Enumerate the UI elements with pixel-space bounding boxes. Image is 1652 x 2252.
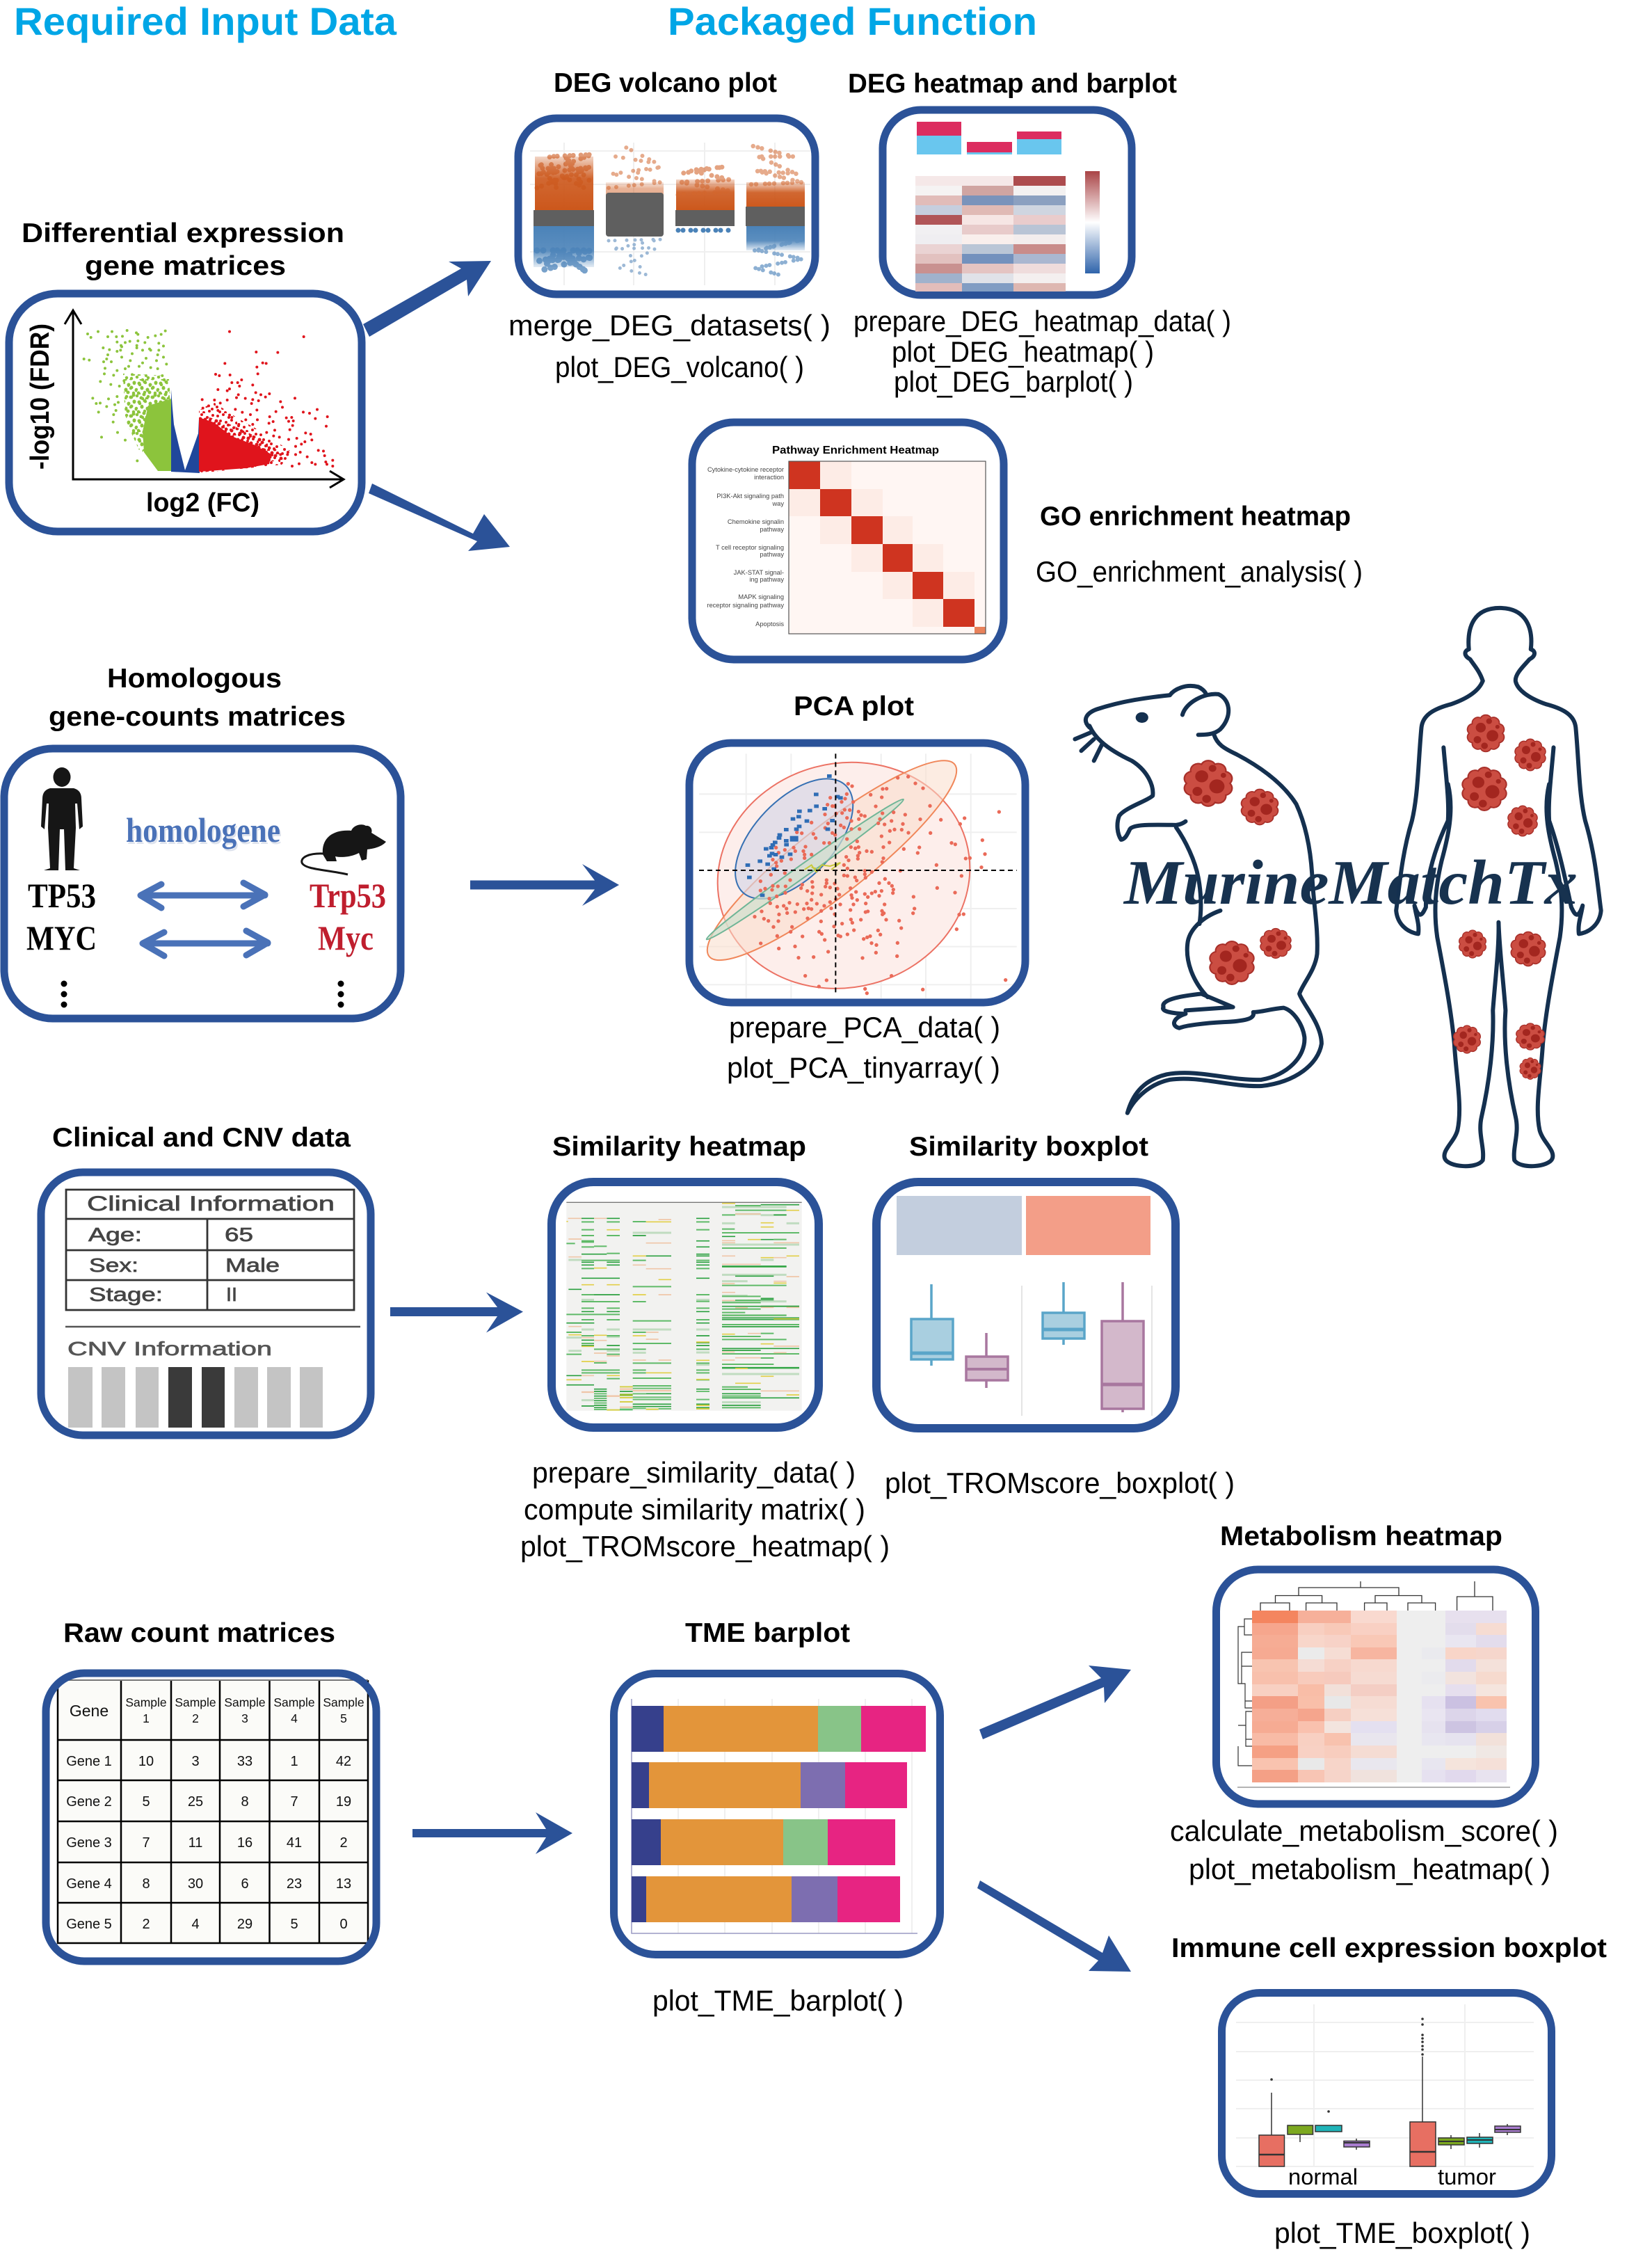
pathway labels: way bbox=[771, 500, 784, 507]
dataset column 2 bbox=[606, 147, 664, 275]
count table: Gene 3 bbox=[66, 1835, 112, 1851]
function labels: PCA: plot_PCA_tinyarray( ) bbox=[727, 1051, 1000, 1084]
pathway labels: Chemokine signalin bbox=[728, 518, 784, 525]
icon: human silhouette bbox=[41, 767, 83, 870]
bar 1 bbox=[632, 1706, 926, 1752]
function labels: similarity heatmap: compute similarity matrix( ) bbox=[524, 1493, 865, 1526]
bar 3 bbox=[632, 1819, 895, 1865]
count table: 1 bbox=[143, 1711, 150, 1725]
dense block rows bbox=[594, 1389, 709, 1407]
function labels: DEG heatmap: prepare_DEG_heatmap_data( ) bbox=[853, 305, 1231, 337]
count table: 3 bbox=[191, 1754, 200, 1769]
pathway labels: JAK-STAT signal- bbox=[734, 569, 784, 576]
peach rows bbox=[568, 1214, 799, 1391]
normal group boxes bbox=[1259, 2079, 1370, 2166]
icon: mouse silhouette bbox=[302, 824, 386, 875]
homologene label: homologene bbox=[126, 810, 280, 849]
heading: Similarity heatmap: Similarity heatmap bbox=[552, 1132, 806, 1162]
heatmap cells bbox=[1252, 1611, 1507, 1782]
heading: GO enrichment heatmap: GO enrichment heatmap bbox=[1040, 502, 1351, 532]
heatmap matrix bbox=[566, 1202, 802, 1411]
count table: 1 bbox=[290, 1754, 298, 1769]
blue sample points bbox=[746, 774, 843, 897]
panel: differential expression volcano bbox=[9, 294, 362, 532]
ellipsis: left bbox=[61, 984, 67, 1005]
double arrow: TP53 to Trp53 bbox=[141, 883, 265, 908]
human gene names: TP53 bbox=[28, 876, 96, 915]
heatmap bbox=[915, 176, 1066, 292]
count table: 8 bbox=[142, 1876, 150, 1892]
red sample points bbox=[755, 776, 1006, 993]
dendrogram: columns bbox=[1260, 1581, 1493, 1611]
dataset column 1 bbox=[534, 154, 594, 273]
tumor group boxes bbox=[1410, 2019, 1521, 2166]
blue non-significant points bbox=[171, 390, 200, 473]
pathway labels bbox=[707, 466, 784, 628]
bar 4 bbox=[632, 1876, 900, 1922]
pathway labels: pathway bbox=[760, 551, 784, 558]
count table: Sample bbox=[323, 1695, 364, 1709]
pathway labels: MAPK signaling bbox=[738, 593, 784, 600]
function labels: DEG heatmap bbox=[853, 305, 1231, 398]
arrow: raw counts to TME bbox=[412, 1812, 572, 1854]
count table: 30 bbox=[188, 1876, 203, 1892]
red upregulated points bbox=[199, 332, 332, 473]
count table: Sample bbox=[125, 1695, 167, 1709]
heading: Homologous gene-counts matrices: Homologous bbox=[107, 664, 282, 694]
function labels: DEG volcano: plot_DEG_volcano( ) bbox=[555, 351, 804, 383]
pathway labels: T cell receptor signaling bbox=[716, 544, 784, 551]
heatmap title: Pathway Enrichment Heatmap bbox=[772, 445, 939, 456]
count table: 5 bbox=[142, 1794, 150, 1810]
function labels: metabolism bbox=[1170, 1814, 1558, 1885]
ellipse: blue bbox=[714, 758, 874, 920]
count table: Gene 2 bbox=[66, 1794, 112, 1810]
mouse gene names: Myc bbox=[318, 918, 374, 957]
count table: 16 bbox=[237, 1835, 252, 1851]
count table: 8 bbox=[241, 1794, 249, 1810]
count table: 29 bbox=[237, 1917, 252, 1932]
clinical table: II bbox=[226, 1284, 237, 1305]
function labels: metabolism: plot_metabolism_heatmap( ) bbox=[1189, 1853, 1550, 1885]
function labels: DEG volcano: merge_DEG_datasets( ) bbox=[508, 309, 831, 342]
human gene names: MYC bbox=[26, 918, 97, 957]
mouse gene names bbox=[310, 876, 386, 957]
heading: Homologous gene-counts matrices bbox=[49, 664, 346, 732]
count table: 25 bbox=[188, 1794, 203, 1810]
mouse gene names: Trp53 bbox=[310, 876, 386, 915]
count table: 7 bbox=[290, 1794, 298, 1810]
count table: 42 bbox=[336, 1754, 351, 1769]
panel: similarity boxplot bbox=[876, 1182, 1176, 1428]
medium green rows bbox=[566, 1206, 799, 1407]
clinical table: Male bbox=[225, 1254, 280, 1276]
arrow: to GO heatmap bbox=[369, 484, 510, 551]
count table: 11 bbox=[189, 1835, 202, 1851]
colour scale bbox=[1085, 171, 1100, 273]
tumors: human bbox=[1454, 715, 1546, 1079]
pathway labels: PI3K-Akt signaling path bbox=[716, 493, 784, 500]
function labels: DEG heatmap: plot_DEG_heatmap( ) bbox=[892, 335, 1154, 368]
dashed axes bbox=[699, 753, 1017, 995]
count table: 2 bbox=[142, 1917, 150, 1932]
heatmap matrix bbox=[789, 461, 986, 634]
origin cluster markers bbox=[805, 863, 840, 872]
heading: Clinical and CNV data: Clinical and CNV data bbox=[52, 1123, 351, 1153]
panel: metabolism heatmap bbox=[1216, 1570, 1536, 1804]
clinical table: 65 bbox=[225, 1224, 253, 1245]
clinical table: Sex: bbox=[89, 1254, 138, 1276]
clinical table: Clinical Information bbox=[87, 1192, 335, 1215]
arrow: to DEG volcano bbox=[363, 261, 491, 337]
panel: similarity heatmap bbox=[552, 1182, 819, 1428]
box 4 bbox=[1102, 1282, 1144, 1412]
count table: 2 bbox=[339, 1835, 348, 1851]
dataset column 3 bbox=[675, 167, 735, 230]
arrow: TME to immune boxplot bbox=[977, 1880, 1131, 1972]
box 2 bbox=[966, 1333, 1008, 1388]
heading: Homologous gene-counts matrices: gene-counts matrices bbox=[49, 702, 346, 732]
ellipse: orange bbox=[688, 737, 976, 984]
count table: 0 bbox=[339, 1917, 348, 1932]
pathway labels: interaction bbox=[754, 474, 784, 481]
dark green rows bbox=[566, 1205, 799, 1406]
heading: PCA plot: PCA plot bbox=[794, 692, 914, 721]
arrow: TME to metabolism bbox=[979, 1666, 1131, 1739]
function labels: DEG volcano bbox=[508, 309, 831, 383]
pathway labels: receptor signaling pathway bbox=[707, 602, 784, 609]
heading: Differential expression gene matrices: gene matrices bbox=[85, 251, 286, 281]
heading: DEG volcano plot: DEG volcano plot bbox=[554, 68, 777, 98]
function labels: PCA: prepare_PCA_data( ) bbox=[729, 1011, 1000, 1044]
bar 2 bbox=[632, 1762, 907, 1808]
ellipse: large red bbox=[692, 735, 995, 1016]
arrow: homologous to PCA bbox=[470, 864, 619, 906]
clinical table: Stage: bbox=[89, 1284, 163, 1305]
count table: 6 bbox=[241, 1876, 249, 1892]
heading: Metabolism heatmap: Metabolism heatmap bbox=[1220, 1522, 1502, 1551]
panel: raw count table bbox=[46, 1673, 376, 1961]
count table: Gene 5 bbox=[66, 1917, 112, 1932]
panel: GO enrichment heatmap bbox=[692, 422, 1004, 660]
clinical table: Age: bbox=[88, 1224, 142, 1245]
function labels: PCA bbox=[727, 1011, 1000, 1084]
homologene label: homologene bbox=[127, 813, 282, 852]
panel: immune cell boxplot bbox=[1221, 1993, 1551, 2194]
count table: Sample bbox=[224, 1695, 266, 1709]
panel: DEG heatmap and barplot bbox=[883, 110, 1132, 295]
illustration: mouse outline bbox=[1075, 686, 1322, 1113]
count table: Sample bbox=[273, 1695, 315, 1709]
count table: 5 bbox=[290, 1917, 298, 1932]
tool name: MurineMatchTx: MurineMatchTx bbox=[1123, 847, 1578, 918]
function label: similarity boxplot: plot_TROMscore_boxplot( ) bbox=[885, 1467, 1235, 1499]
heading: TME barplot: TME barplot bbox=[685, 1618, 850, 1648]
dataset column 4 bbox=[746, 145, 805, 275]
green downregulated points bbox=[84, 330, 172, 471]
count table: Gene bbox=[70, 1702, 109, 1720]
count table bbox=[58, 1680, 368, 1943]
y axis label: -log10 (FDR) bbox=[26, 324, 55, 470]
heading: Differential expression gene matrices bbox=[22, 218, 344, 281]
CNV heading: CNV Information bbox=[67, 1338, 272, 1359]
count table: 4 bbox=[291, 1711, 298, 1725]
panel: clinical and CNV bbox=[41, 1172, 371, 1435]
count table: Gene 4 bbox=[66, 1876, 112, 1892]
box 3 bbox=[1043, 1282, 1084, 1345]
group header blue bbox=[897, 1196, 1022, 1255]
count table: 3 bbox=[241, 1711, 248, 1725]
count table: 5 bbox=[340, 1711, 347, 1725]
count table: 4 bbox=[191, 1917, 200, 1932]
panel: DEG volcano plot bbox=[518, 118, 815, 294]
function label: TME barplot: plot_TME_barplot( ) bbox=[652, 1984, 904, 2017]
count table: 19 bbox=[336, 1794, 351, 1810]
count table: 33 bbox=[237, 1754, 252, 1769]
heading: Immune cell expression boxplot: Immune cell expression boxplot bbox=[1171, 1933, 1607, 1963]
heading: Required Input Data: Required Input Data bbox=[14, 0, 397, 43]
group header salmon bbox=[1026, 1196, 1150, 1255]
clinical table bbox=[66, 1190, 354, 1310]
illustration: human outline bbox=[1396, 608, 1601, 1166]
double arrow: MYC to Myc bbox=[143, 931, 268, 956]
function labels: similarity heatmap: prepare_similarity_data( ) bbox=[532, 1456, 856, 1489]
heading: Similarity boxplot: Similarity boxplot bbox=[909, 1132, 1148, 1162]
dendrogram: rows bbox=[1238, 1619, 1252, 1766]
count table: Sample bbox=[175, 1695, 216, 1709]
heading: Raw count matrices: Raw count matrices bbox=[63, 1618, 335, 1648]
count table: 13 bbox=[336, 1876, 351, 1892]
PCA chart bbox=[688, 735, 1017, 1016]
panel: homologous genes bbox=[4, 749, 401, 1019]
function labels: metabolism: calculate_metabolism_score( ) bbox=[1170, 1814, 1558, 1847]
human gene names bbox=[26, 876, 97, 957]
axes bbox=[65, 310, 344, 488]
count table: 2 bbox=[192, 1711, 199, 1725]
function labels: similarity heatmap bbox=[520, 1456, 890, 1563]
heading: DEG heatmap and barplot: DEG heatmap and barplot bbox=[848, 69, 1177, 99]
function label: TME boxplot: plot_TME_boxplot( ) bbox=[1274, 2217, 1530, 2249]
yellow rows bbox=[566, 1204, 799, 1395]
x axis label: log2 (FC) bbox=[146, 488, 259, 518]
pathway labels: Cytokine-cytokine receptor bbox=[707, 466, 784, 473]
count table: 23 bbox=[287, 1876, 302, 1892]
stacked barplot bbox=[917, 122, 1061, 154]
pathway labels: ing pathway bbox=[749, 576, 784, 583]
panel: PCA plot bbox=[688, 735, 1025, 1016]
box 1 bbox=[911, 1284, 953, 1366]
function labels: DEG heatmap: plot_DEG_barplot( ) bbox=[894, 365, 1133, 398]
pathway labels: pathway bbox=[760, 526, 784, 533]
function labels: similarity heatmap: plot_TROMscore_heatmap( ) bbox=[520, 1530, 890, 1563]
x label: normal: normal bbox=[1288, 2164, 1358, 2189]
panel: TME barplot bbox=[614, 1674, 940, 1955]
count table: 10 bbox=[138, 1754, 154, 1769]
ellipse: green bbox=[703, 794, 907, 944]
CNV bars bbox=[68, 1367, 323, 1428]
x label: tumor: tumor bbox=[1438, 2164, 1496, 2189]
pale green rows bbox=[566, 1207, 799, 1403]
count table: 7 bbox=[142, 1835, 150, 1851]
function label: GO enrichment: GO_enrichment_analysis( ) bbox=[1036, 555, 1363, 588]
heading: Differential expression gene matrices: Differential expression bbox=[22, 218, 344, 248]
pathway labels: Apoptosis bbox=[755, 621, 784, 628]
ellipsis: right bbox=[338, 984, 344, 1005]
arrow: clinical to similarity bbox=[390, 1293, 523, 1333]
count table: 41 bbox=[287, 1835, 302, 1851]
heading: Packaged Function: Packaged Function bbox=[668, 0, 1037, 43]
count table: Gene 1 bbox=[66, 1754, 112, 1769]
tumors: mouse bbox=[1185, 760, 1291, 984]
